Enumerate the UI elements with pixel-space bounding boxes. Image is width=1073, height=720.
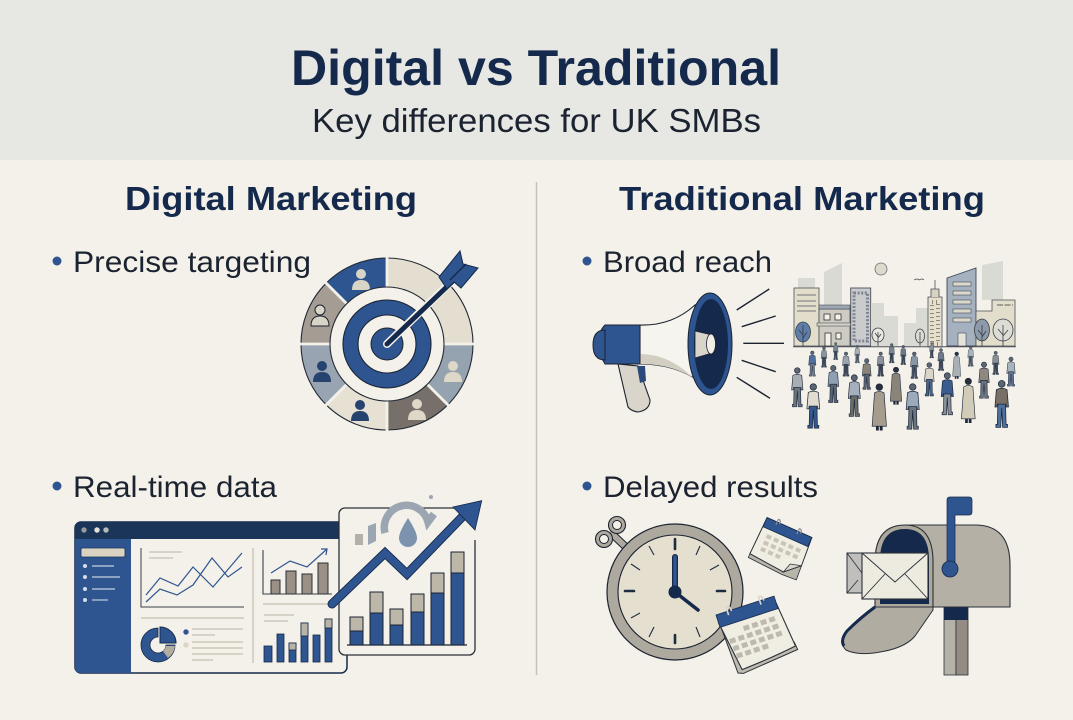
subtitle: Key differences for UK SMBs <box>312 102 761 139</box>
header band <box>0 0 1073 160</box>
icon: small calendar <box>747 514 816 581</box>
bullet: broad reach: Broad reach <box>603 246 772 279</box>
icon: megaphone <box>593 289 784 412</box>
chart card with rising arrow <box>332 495 482 655</box>
column divider <box>536 182 538 675</box>
heading: digital marketing: Digital Marketing <box>125 180 417 217</box>
heading: traditional marketing: Traditional Marketing <box>619 180 985 217</box>
bullet: precise targeting: Precise targeting <box>73 246 311 279</box>
dashboard window <box>75 522 347 673</box>
icon: large calendar <box>715 590 799 676</box>
icon: stopwatch clock <box>596 516 743 660</box>
title: Digital vs Traditional <box>291 40 781 96</box>
bullet: delayed results: Delayed results <box>603 471 818 504</box>
bullet: real-time data: Real-time data <box>73 471 277 504</box>
icon: audience target with arrow <box>298 251 478 433</box>
illustration: city skyline <box>793 261 1016 347</box>
illustration: crowd of people <box>792 342 1015 431</box>
icon: mailbox with letters <box>842 497 1010 675</box>
